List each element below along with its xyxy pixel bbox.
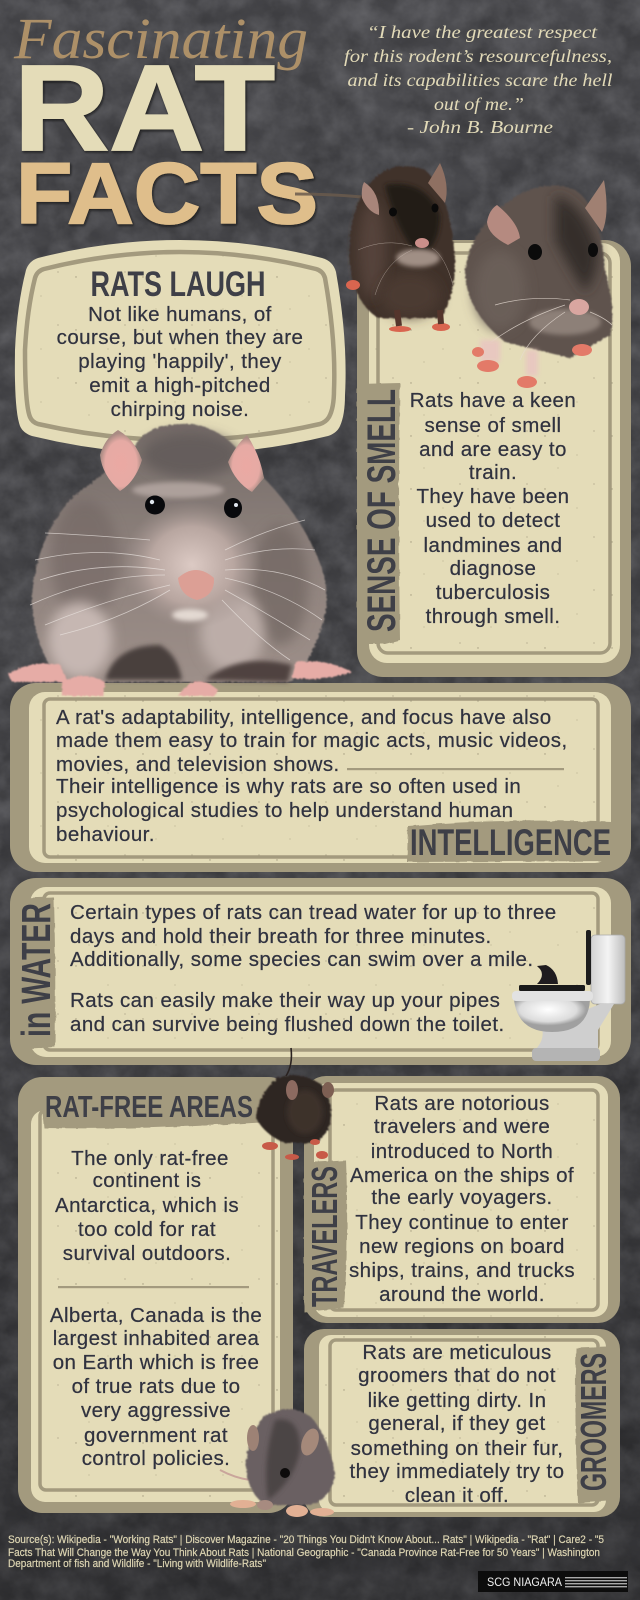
- text: groomers body: Rats are meticulous: [362, 1341, 552, 1364]
- text: in water body: [70, 901, 557, 1036]
- text: sense of smell body: They have been: [416, 485, 570, 508]
- text: sense of smell body: diagnose: [450, 557, 536, 580]
- label patch: [357, 383, 400, 644]
- text: sense of smell body: used to detect: [426, 509, 560, 532]
- text: groomers body: something on their fur,: [351, 1437, 563, 1460]
- illustration: top dark rat: [295, 163, 455, 332]
- heading: groomers: GROOMERS: [573, 1353, 614, 1491]
- illustration: right grey rat: [465, 180, 612, 388]
- text: sense of smell body: [410, 389, 576, 628]
- text: groomers body: clean it off.: [405, 1484, 509, 1507]
- quote: out of me.”: [434, 94, 524, 114]
- text: travelers body: They continue to enter: [355, 1211, 569, 1234]
- text: sense of smell body: and are easy to: [419, 438, 567, 461]
- icon: toilet with rat: [512, 930, 625, 1061]
- text: alberta: of true rats due to: [72, 1375, 240, 1398]
- text: antarctica: [55, 1147, 239, 1265]
- big rat: paws: [8, 661, 352, 696]
- heading: travelers: TRAVELERS: [304, 1166, 345, 1307]
- quote: for this rodent’s resourcefulness,: [344, 46, 612, 66]
- text: rats laugh body: playing 'happily', they: [78, 350, 282, 373]
- big rat: eyes: [145, 496, 242, 518]
- label patch: [22, 897, 55, 1049]
- text: in water body: Additionally, some species can swim over a mile.: [70, 948, 533, 971]
- panel: rat-free areas: [18, 1077, 293, 1513]
- text: rats laugh body: chirping noise.: [111, 398, 249, 421]
- heading: in water: in WATER: [13, 903, 59, 1037]
- text: in water body: and can survive being flushed down the toilet.: [70, 1013, 505, 1036]
- text: antarctica: Antarctica, which is: [55, 1194, 239, 1217]
- label patch: [575, 1347, 608, 1503]
- text: groomers body: like getting dirty. In: [368, 1389, 546, 1412]
- panel: rats laugh: [15, 240, 346, 454]
- text: intelligence body: Their intelligence is why rats are so often used in: [56, 775, 521, 798]
- text: alberta: very aggressive: [81, 1399, 231, 1422]
- heading: rats laugh: RATS LAUGH: [90, 265, 266, 304]
- title word: RAT: RAT: [14, 40, 275, 176]
- text: travelers body: America on the ships of: [350, 1164, 574, 1187]
- panel: travelers: [304, 1076, 620, 1323]
- text: travelers body: [349, 1092, 575, 1306]
- text: intelligence body: made them easy to train for magic acts, music videos,: [56, 729, 568, 752]
- text: in water body: Rats can easily make their way up your pipes: [70, 989, 500, 1012]
- text: rats laugh body: emit a high-pitched: [89, 374, 271, 397]
- panel: in water: [10, 878, 631, 1065]
- panel: intelligence: [10, 683, 631, 872]
- text: travelers body: the early voyagers.: [371, 1186, 553, 1209]
- text: travelers body: new regions on board: [359, 1235, 565, 1258]
- label patch: [304, 1160, 347, 1312]
- text: alberta: on Earth which is free: [53, 1351, 259, 1374]
- logo: SCG Niagara: SCG NIAGARA: [487, 1575, 562, 1589]
- text: sense of smell body: through smell.: [426, 605, 560, 628]
- heading: sense of smell: SENSE OF SMELL: [360, 389, 404, 632]
- text: alberta: Alberta, Canada is the: [50, 1304, 262, 1327]
- text: sense of smell body: tuberculosis: [436, 581, 550, 604]
- text: sense of smell body: sense of smell: [424, 414, 562, 437]
- text: antarctica: survival outdoors.: [63, 1242, 231, 1265]
- text: groomers body: they immediately try to: [350, 1460, 564, 1483]
- sources: [8, 1534, 604, 1570]
- text: alberta: control policies.: [82, 1447, 230, 1470]
- title word: Fascinating: Fascinating: [13, 6, 308, 71]
- quote: - John B. Bourne: [407, 117, 553, 137]
- text: antarctica: too cold for rat: [78, 1218, 216, 1241]
- text: travelers body: ships, trains, and trucks: [349, 1259, 575, 1282]
- text: travelers body: Rats are notorious: [374, 1092, 550, 1115]
- text: rats laugh body: [57, 303, 303, 421]
- quote: and its capabilities scare the hell: [348, 70, 612, 90]
- text: groomers body: general, if they get: [368, 1412, 546, 1435]
- text: rats laugh body: Not like humans, of: [88, 303, 272, 326]
- text: in water body: days and hold their breath for three minutes.: [70, 925, 492, 948]
- text: intelligence body: movies, and television shows.: [56, 753, 340, 776]
- text: intelligence body: behaviour.: [56, 823, 155, 846]
- text: travelers body: around the world.: [379, 1283, 545, 1306]
- text: travelers body: travelers and were: [374, 1115, 550, 1138]
- illustration: big grey rat: [8, 424, 352, 696]
- quote: “I have the greatest respect: [367, 22, 598, 42]
- title word: FACTS: FACTS: [16, 146, 318, 242]
- heading: rat-free areas: RAT-FREE AREAS: [45, 1089, 253, 1124]
- logo: SCG Niagara: [478, 1571, 628, 1592]
- text: antarctica: continent is: [93, 1169, 201, 1192]
- label patch: [407, 821, 612, 862]
- text: in water body: Certain types of rats can tread water for up to three: [70, 901, 557, 924]
- text: alberta: [50, 1304, 262, 1470]
- text: rats laugh body: course, but when they are: [57, 326, 303, 349]
- text: intelligence body: psychological studies to help understand human: [56, 799, 513, 822]
- big rat: whiskers: [30, 520, 325, 660]
- panel: sense of smell: [357, 240, 631, 677]
- text: intelligence body: A rat's adaptability, intelligence, and focus have also: [56, 706, 552, 729]
- text: alberta: largest inhabited area: [53, 1327, 259, 1350]
- text: groomers body: groomers that do not: [358, 1364, 556, 1387]
- label patch: [40, 1084, 268, 1128]
- text: sense of smell body: landmines and: [424, 534, 562, 557]
- icon: small black rat on seat: [537, 965, 558, 984]
- quote: [344, 22, 612, 137]
- text: sense of smell body: Rats have a keen: [410, 389, 576, 412]
- text: alberta: government rat: [84, 1424, 228, 1447]
- big rat: ears: [100, 430, 264, 492]
- illustration: grey rat at bottom: [220, 1409, 335, 1517]
- sources: Department of fish and Wildlife - "Living with Wildlife-Rats": [8, 1558, 266, 1570]
- text: antarctica: The only rat-free: [71, 1147, 229, 1170]
- text: groomers body: [350, 1341, 564, 1507]
- big rat: nose and mouth: [172, 570, 214, 621]
- text: travelers body: introduced to North: [371, 1140, 553, 1163]
- text: sense of smell body: train.: [469, 461, 517, 484]
- illustration: dark rat between panels: [256, 1048, 334, 1160]
- title: [13, 6, 318, 242]
- text: intelligence body: [56, 706, 568, 846]
- panel: groomers: [304, 1329, 620, 1517]
